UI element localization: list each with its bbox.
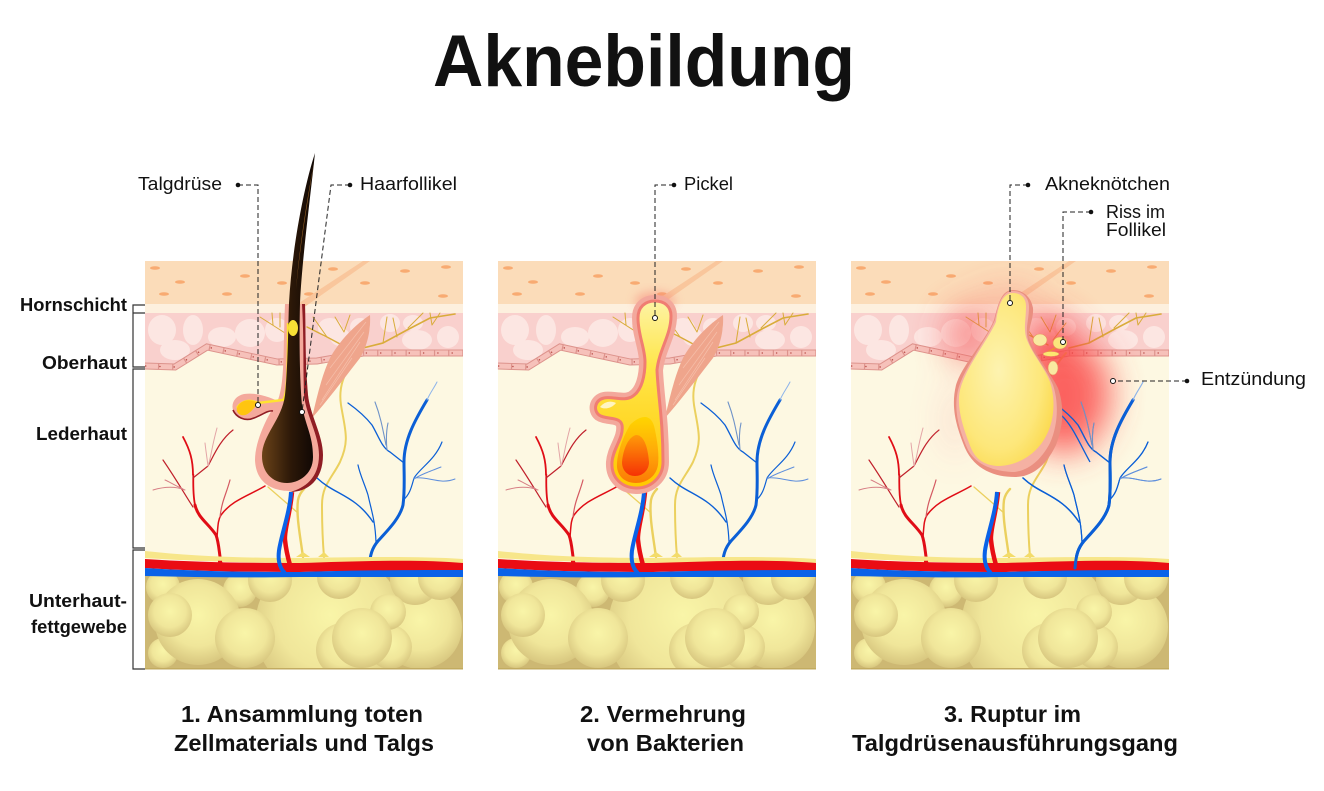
caption 1: Zellmaterials und Talgs xyxy=(174,730,434,756)
layer labels: Lederhaut xyxy=(36,424,127,444)
layer labels: Unterhaut- xyxy=(29,591,127,611)
caption 3 xyxy=(852,701,1178,756)
caption 3: Talgdrüsenausführungsgang xyxy=(852,730,1178,756)
panel 3: skin cross-section with ruptured nodule xyxy=(851,261,1169,702)
callout: Talgdrüse xyxy=(138,173,260,408)
callout: Entzündung xyxy=(1110,368,1306,389)
callout: Riss im Follikel xyxy=(1060,201,1166,344)
panel 1: skin cross-section with hair follicle xyxy=(145,153,463,702)
pimple glow xyxy=(635,292,675,310)
callout: Riss im Follikel: Riss im xyxy=(1106,201,1165,222)
layer brackets xyxy=(133,305,145,669)
follicle 3: large nodule xyxy=(954,290,1062,477)
muscle 1 xyxy=(312,315,370,418)
callout: Akneknötchen xyxy=(1008,173,1170,306)
caption 1 xyxy=(174,701,434,756)
callout: Pickel: Pickel xyxy=(684,173,733,194)
callout: Pickel xyxy=(652,173,733,320)
muscle 2 xyxy=(665,315,723,418)
callout: Haarfollikel: Haarfollikel xyxy=(360,173,457,194)
callout: Riss im Follikel: Follikel xyxy=(1106,219,1166,240)
callout: Talgdrüse: Talgdrüse xyxy=(138,173,222,194)
callout: Entzündung: Entzündung xyxy=(1201,368,1306,389)
layer labels xyxy=(20,295,127,637)
callout: Haarfollikel xyxy=(300,173,457,414)
inflammation glow xyxy=(941,290,1110,460)
caption 2: von Bakterien xyxy=(587,730,744,756)
title: Aknebildung xyxy=(433,21,855,102)
rupture droplets xyxy=(1033,334,1067,375)
caption 2: 2. Vermehrung xyxy=(580,701,746,727)
vein branch near the nodule xyxy=(1061,415,1090,462)
callout: Akneknötchen: Akneknötchen xyxy=(1045,173,1170,194)
caption 2 xyxy=(580,701,746,756)
layer labels: fettgewebe xyxy=(31,617,127,637)
layer labels: Oberhaut xyxy=(42,353,127,373)
follicle 1: hair, sheath and sebaceous gland xyxy=(232,153,323,492)
caption 3: 3. Ruptur im xyxy=(944,701,1081,727)
panel 2: skin cross-section with pimple xyxy=(498,261,816,702)
follicle 2: pimple filled with pus xyxy=(596,301,671,488)
caption 1: 1. Ansammlung toten xyxy=(181,701,423,727)
blue vessel tree over the glow xyxy=(1023,382,1161,568)
layer labels: Hornschicht xyxy=(20,295,127,315)
